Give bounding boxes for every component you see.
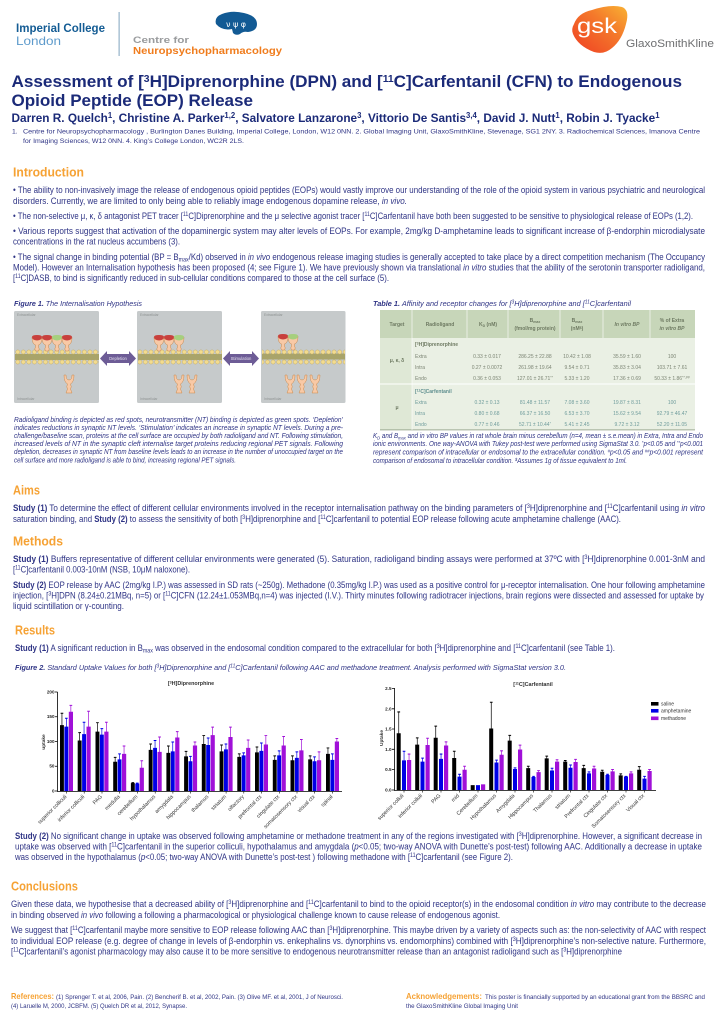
text block: results study 2: Study (2) No significant change in uptake was observed following amphetamine or methadone treatment in any of the regions investigated with [ [15, 831, 578, 841]
bar chart: [3H]Diprenorphine uptake: PAG [92, 794, 104, 806]
text block: aims: C]carfentanil using [613, 503, 681, 513]
text block: methods: C]carfentanil 0.003-10nM (NSB, 10μM naloxone). [21, 564, 190, 574]
table 1 title: Table 1. Affinity and receptor changes for [ [373, 299, 515, 308]
heading: Methods: Methods [13, 534, 63, 548]
table: **,## [682, 376, 690, 380]
text block: introduction: 11 [15, 274, 21, 280]
text block: results study 2: was observed in the hypothalamus (p<0.05; two-way ANOVA with Dunette’s post-test ) following methadone with [ [15, 852, 444, 862]
text block: conclusions: 11 [72, 926, 78, 932]
arrow: stimulation: Stimulation [231, 356, 252, 361]
table: Extra [415, 400, 427, 406]
table: 100 [668, 400, 676, 406]
bar chart: [11C]Carfentanil uptake: 0.5 [385, 767, 392, 772]
table: 5.33 ± 1.20 [564, 376, 590, 382]
table 1 title: C]carfentanil [590, 299, 631, 308]
figure 1 caption [14, 417, 344, 464]
authors: , Robin J. Tyacke [560, 111, 655, 125]
table: [ [415, 389, 417, 395]
table 1 caption: max [398, 436, 407, 440]
table: * [550, 422, 552, 426]
table: 10.42 ± 1.08 [563, 354, 591, 360]
table: 286.25 ± 22.88 [518, 354, 552, 360]
bar chart: [3H]Diprenorphine uptake: hippocampus [166, 794, 193, 821]
references: (4) Laruelle M, 2000, JCBFM. (5) Quelch DR et al, 2012, Synapse. [11, 1004, 187, 1010]
text block: results study 1: was observed in the endosomal condition compared to the extracellular for both [ [153, 643, 437, 653]
logo: Centre for Neuropsychopharmacology: Neuropsychopharmacology [133, 46, 282, 57]
figure 1 caption: challenge/baseline scan, proteins at the cell surface are occupied by both radioligand and NT. Following stimulation, [14, 433, 343, 440]
table: H]Diprenorphine [419, 342, 458, 348]
figure 1 caption: increased levels of NT in the synaptic cleft internalise target proteins reducing regional PET signals. Following [14, 441, 343, 448]
bar chart: [11C]Carfentanil uptake: C]Carfentanil [519, 682, 553, 688]
table: B [530, 318, 533, 324]
table 1 caption: # [608, 448, 610, 454]
table: Radioligand [426, 322, 454, 328]
table 1 caption: and B [380, 433, 399, 440]
affiliations: Centre for Neuropsychopharmacology , Burlington Danes Building, Imperial College, London, W12 0NN. 2. Global Imaging Unit, GlaxoSmithKline, Stevenage, SG1 2NY. 3. Radiochemical Sciences, Imanova Centre [23, 128, 700, 136]
text block: aims: C]carfentanil to potential EOP release following acute amphetamine challenge (AAC). [326, 514, 621, 524]
table: 100 [668, 354, 676, 360]
text block: aims: Study (1) To determine the effect of different cellular environments involved in the receptor internalisation pathway on the binding parameters of [ [13, 503, 578, 513]
table: 52.71 ± 10.44 [519, 422, 550, 428]
text block: results study 1: H]diprenorphine and [ [440, 643, 516, 653]
text block: results study 2 [14, 831, 702, 862]
text block: methods: 11 [15, 566, 21, 572]
table: 19.87 ± 8.31 [613, 400, 641, 406]
text block: introduction: C]DASB, to bind is significantly reduced in sub-cellular conditions compared to those at the cell surface (5). [21, 273, 389, 283]
bar chart: [3H]Diprenorphine uptake: spinal [320, 794, 334, 808]
heading: Aims: Aims [13, 482, 40, 498]
bar chart: [11C]Carfentanil uptake: Thalamus [532, 793, 554, 814]
text block: results study 1: max [143, 648, 153, 654]
text block: conclusions [11, 899, 706, 956]
text block: conclusions: 3 [563, 948, 567, 954]
figure 2 title: H]Diprenorphine and [ [159, 663, 231, 672]
authors: Darren R. Quelch [12, 111, 111, 125]
bar chart: [11C]Carfentanil uptake: Hippocampus [507, 793, 535, 821]
table: 0.80 ± 0.68 [474, 411, 500, 417]
text block: conclusions: 3 [513, 937, 516, 943]
text block: methods: Study (1) Buffers representative of different cellular environments were generated (5). Saturation, radioligand binding assays were performed at 37ºC with [ [13, 554, 620, 564]
table 1 caption: ** [677, 440, 680, 445]
table 1 caption: * [642, 440, 644, 445]
text block: introduction: disorders. Currently, we are limited to only being able to reliably image endogenous dopamine release, in vivo. [13, 196, 407, 206]
figure 2 title: 11 [230, 664, 235, 670]
table: 0.32 ± 0.13 [474, 400, 500, 406]
table: C]Carfentanil [420, 389, 452, 395]
text block: conclusions: 3 [329, 926, 333, 932]
figure 2 title: 3 [157, 664, 159, 670]
table: μ [395, 405, 399, 411]
legend: saline [661, 702, 674, 708]
text block: introduction: • The non-selective μ, κ, δ antagonist PET tracer [ [13, 211, 208, 221]
table 1 caption [373, 433, 704, 465]
table: Intra [415, 411, 425, 417]
legend: amphetamine [661, 709, 692, 715]
text block: conclusions: H]diprenorphine’s non-selective nature. Furthermore, [516, 936, 706, 946]
bar chart: [11C]Carfentanil uptake: 0.0 [385, 788, 392, 792]
logo: GSK GlaxoSmithKline [572, 6, 714, 53]
diagram: membrane panels and receptors: Extracellular [264, 313, 284, 317]
text block: introduction: 11 [183, 212, 189, 218]
figure 1 title: Figure 1. The Internalisation Hypothesis [14, 299, 142, 308]
bar chart: [11C]Carfentanil uptake: inferior colluli [397, 793, 424, 820]
bar chart: [3H]Diprenorphine uptake: 50 [49, 764, 55, 769]
authors: , Salvatore Lanzarone [235, 111, 357, 125]
authors: , Vittorio De Santis [361, 111, 466, 125]
title: 3 [144, 74, 150, 85]
figure 1 caption: Radioligand binding is depicted as red spots, neurotransmitter (NT) binding is depicted as green spots. ‘Depletion’ [14, 417, 343, 424]
bar chart: [3H]Diprenorphine uptake: 150 [47, 714, 55, 719]
table: 6.53 ± 3.70 [564, 411, 590, 417]
text block: methods: 3 [48, 592, 52, 598]
text block: methods: [ [13, 564, 15, 574]
text block: conclusions: in vitro may contribute to the decrease [571, 899, 719, 909]
arrow: depletion: Depletion [109, 356, 128, 361]
table: 9.72 ± 3.12 [614, 422, 640, 428]
table: 9.54 ± 0.71 [564, 365, 590, 371]
text block: results study 1: 3 [437, 644, 440, 650]
text block: introduction: [ [13, 273, 15, 283]
affiliations: for Imaging Sciences, W12 0NN. 4. King’s College London, WC2R 2LS. [23, 138, 244, 145]
text block: results study 1: 11 [515, 644, 522, 650]
references [11, 991, 343, 1010]
text block: methods: injection, [ [13, 590, 53, 600]
logo: Centre for Neuropsychopharmacology: ν ψ φ [226, 20, 246, 29]
text block: conclusions: 3 [228, 900, 232, 906]
text block: results study 2: C]carfentanil in the superior colliculi, hypothalamus and amygdala ( [117, 842, 354, 852]
text block: results study 2: uptake was observed with [ [15, 842, 122, 852]
bar chart: [11C]Carfentanil uptake: [ [513, 682, 515, 688]
references: (1) Sprenger T. et al, 2006, Pain. (2) Bencherif B. et al, 2002, Pain. (3) Olive MF. et al, 2001, J of Neurosci. [56, 995, 343, 1001]
figure 1 caption: depletion, decreases in synaptic NT from baseline levels leads to an increase in the number of unoccupied target on the [14, 449, 343, 456]
bar chart: [11C]Carfentanil uptake: striatum [554, 793, 572, 811]
table 1 caption: ionic environments. One way-ANOVA with Tukey post-test were performed using SigmaStat 3.0. [373, 441, 666, 448]
text block: introduction: max [179, 258, 189, 264]
text block: aims: 3 [242, 515, 246, 521]
title: C]Carfentanil (CFN) to Endogenous [394, 73, 682, 91]
logo: Centre for Neuropsychopharmacology [133, 12, 282, 57]
logo: Imperial College London: London [16, 34, 61, 48]
authors: , Christine A. Parker [112, 111, 225, 125]
authors: 3,4 [466, 111, 477, 120]
authors: 3 [357, 111, 362, 120]
authors: , David J. Nutt [477, 111, 555, 125]
bar chart: [11C]Carfentanil uptake: 2.5 [385, 686, 392, 691]
text block: aims: 11 [607, 504, 613, 510]
bar chart: [11C]Carfentanil uptake: 11 [515, 682, 519, 686]
references: References: [11, 991, 54, 1001]
text block: introduction [13, 185, 705, 283]
table: in vitro BP [659, 326, 685, 332]
table 1 caption: ## [645, 448, 650, 454]
bar chart: [3H]Diprenorphine uptake: H]Diprenorphine [172, 681, 214, 687]
table: 5.41 ± 2.45 [564, 422, 590, 428]
text block: introduction: Model). However an Internalisation hypothesis has been proposed (4; see Figure 1). We have previously shown via translational in vitro studies that the ability of the serotonin transporter radioligand, [13, 262, 705, 272]
table 1 caption: comparison of endosomal to intracellular condition. [373, 458, 528, 465]
bar chart: [11C]Carfentanil uptake: PAG [430, 793, 442, 805]
diagram: membrane panels and receptors: Intracellular [140, 397, 158, 401]
figure 2 title: Figure 2. Standard Uptake Values for both [ [15, 663, 162, 672]
bar chart: [3H]Diprenorphine uptake: thalamus [191, 794, 210, 814]
text block: aims: 3 [527, 504, 530, 510]
table 1 caption: represent comparison of intracellular or endosomal to the extracellular condition. [373, 450, 618, 456]
logo: Imperial College London: Imperial College [16, 21, 105, 35]
acknowledgements: This poster is financially supported by an educational grant from the BBSRC and [485, 995, 705, 1001]
text block: methods [13, 554, 705, 611]
panel: table 1 affinity and receptor changes [373, 299, 704, 465]
bar chart: [11C]Carfentanil uptake [377, 682, 692, 830]
table: 7.08 ± 3.60 [564, 400, 590, 406]
title [12, 73, 682, 110]
table: 0.33 ± 0.017 [473, 354, 501, 360]
heading: Conclusions: Conclusions [11, 878, 78, 894]
text block: introduction: • The signal change in binding potential (BP = B [13, 252, 201, 262]
diagram: membrane panels and receptors: Extracellular [140, 313, 160, 317]
bar chart: [11C]Carfentanil uptake: 1.0 [385, 747, 392, 752]
bar chart: [11C]Carfentanil uptake: Prefrontal ctx [564, 793, 591, 820]
text block: conclusions: Given these data, we hypothesise that a decreased ability of [ [11, 899, 253, 909]
table 1 caption: D [377, 436, 381, 440]
text block: results study 1: Study (1) A significant reduction in B [15, 643, 155, 653]
text block: methods: H]diprenorphine 0.001-3nM and [588, 554, 705, 564]
acknowledgements [406, 991, 705, 1010]
table: 127.01 ± 26.71 [517, 376, 550, 382]
bar chart: [3H]Diprenorphine uptake: 0 [52, 788, 55, 794]
table: μ, κ, δ [390, 358, 404, 364]
legend [651, 702, 692, 722]
bar chart: [3H]Diprenorphine uptake: 3 [170, 680, 172, 684]
logo: Centre for Neuropsychopharmacology: Centre for [133, 35, 189, 46]
title: 11 [383, 74, 394, 85]
table: max [575, 320, 582, 324]
bar chart: [3H]Diprenorphine uptake: somatosensory ctx [263, 794, 299, 830]
table 1 caption: Assumes 1g of tissue equivalent to 1ml. [516, 458, 627, 465]
authors: 1 [108, 111, 113, 120]
legend: methadone [661, 716, 686, 722]
table: Intra [415, 365, 425, 371]
table: 35.83 ± 3.04 [613, 365, 641, 371]
text block: conclusions: to individual EOP release (e.g. degree of change in levels of β-endorphin vs. enkephalins vs. dynorphins vs. endomorphins) combined with [ [11, 936, 560, 946]
text block: results study 1: C]carfentanil (see Table 1). [521, 643, 615, 653]
bar chart: [3H]Diprenorphine uptake: prefrontal ctx [237, 794, 264, 820]
table 1 title: H]diprenorphine and [ [514, 299, 586, 308]
figure 1 caption: cell surface and more radioligand is able to bind, increasing regional PET signals. [14, 458, 236, 464]
bar chart: [11C]Carfentanil uptake: mid [451, 793, 461, 804]
table: (fmol/mg protein) [514, 326, 556, 332]
table: ** [550, 376, 554, 380]
table: 0.77 ± 0.46 [474, 422, 500, 428]
authors: 1,2 [224, 111, 236, 120]
text block: results study 2: C]carfentanil (see Figure 2). [416, 852, 513, 862]
bar chart: [3H]Diprenorphine uptake: hypothalamus [129, 794, 157, 822]
text block: conclusions: H]diprenorphine and [ [231, 899, 309, 909]
bar chart: [11C]Carfentanil uptake: Uptake [379, 730, 385, 746]
table: 52.20 ± 11.05 [657, 422, 687, 428]
table: (nM) [485, 322, 497, 328]
text block: results study 2: H]diprenorphine. However, a significant decrease in [522, 831, 702, 841]
bar chart: [3H]Diprenorphine uptake: medulla [104, 794, 122, 812]
table 1 caption: p<0.001 [679, 441, 703, 448]
bar chart: [3H]Diprenorphine uptake: 100 [47, 739, 55, 744]
text block: results study 2: 11 [410, 853, 416, 859]
bar chart: [11C]Carfentanil uptake: Amygdala [495, 793, 516, 814]
text block: aims: saturation binding, and Study (2) to assess the sensitivity of both [ [13, 514, 258, 524]
text block: conclusions: [ [11, 946, 13, 956]
table: max [533, 320, 540, 324]
bar chart: [11C]Carfentanil uptake: Cingulate ctx [583, 793, 609, 819]
arrow: depletion [100, 351, 136, 366]
text block: introduction: 11 [364, 212, 370, 218]
title: Opioid Peptide (EOP) Release [12, 92, 253, 110]
table: B [572, 318, 575, 324]
bar chart: [3H]Diprenorphine uptake: amygdala [154, 794, 175, 815]
bar chart: [3H]Diprenorphine uptake: uptake [41, 734, 47, 750]
diagram: membrane panels and receptors: Extracellular [17, 313, 37, 317]
bar chart: [11C]Carfentanil uptake: Visual ctx [625, 793, 646, 814]
bar chart: [11C]Carfentanil uptake: Somatosensory ctx [591, 793, 628, 830]
text block: conclusions: 11 [308, 900, 314, 906]
table: D [483, 324, 486, 328]
table 1 caption: K [373, 433, 378, 440]
text block: aims: H]diprenorphine and [ [245, 514, 321, 524]
bar chart: [11C]Carfentanil uptake: Hypothalamus [469, 793, 498, 822]
table: [ [415, 342, 417, 348]
logo: Imperial College London [16, 12, 120, 56]
table 1 caption: p<0.05 and [643, 441, 677, 448]
heading: Results: Results [15, 622, 55, 638]
bar chart: [3H]Diprenorphine uptake: striatum [210, 794, 228, 812]
text block: aims [13, 503, 705, 524]
table: (nM [571, 326, 580, 332]
table: ) [582, 326, 584, 332]
bar chart: [11C]Carfentanil uptake: superior colluli [377, 793, 405, 822]
bar chart: [3H]Diprenorphine uptake: cingulate ctx [256, 794, 281, 820]
table 1 caption: $ [514, 457, 518, 462]
acknowledgements: the GlaxoSmithKline Global Imaging Unit [406, 1004, 518, 1010]
figure 1 caption: indicates reductions in synaptic NT levels. ‘Stimulation’ indicates an increase in synaptic NT levels. During a pre- [14, 425, 344, 432]
bar chart: [3H]Diprenorphine uptake: superior colliculi [37, 794, 68, 826]
text block: aims: in vitro [681, 503, 705, 513]
text block: conclusions: We suggest that [ [11, 925, 80, 935]
text block: aims: 11 [320, 515, 326, 521]
authors: 1 [555, 111, 560, 120]
affiliations: 1. [12, 128, 18, 136]
bar chart: [3H]Diprenorphine uptake: olfactory [227, 794, 246, 813]
bar chart: [3H]Diprenorphine uptake: [ [168, 681, 170, 687]
table: K [479, 322, 483, 328]
text block: conclusions: in binding observed in vivo following a following a pharmacological or physiological challenge known to cause release of endogenous agonist. [11, 910, 500, 920]
table: Extra [415, 354, 427, 360]
table: Target [390, 322, 405, 328]
text block: conclusions: 11 [13, 948, 19, 954]
text block: conclusions: C]carfentanil maybe more sensitive to EOP release following AAC than [ [78, 925, 330, 935]
diagram: membrane panels and receptors: Intracellular [17, 397, 35, 401]
logo: GSK GlaxoSmithKline: GlaxoSmithKline [626, 38, 714, 50]
text block: methods: 11 [165, 592, 171, 598]
text block: methods: 3 [584, 555, 588, 561]
table: 66.37 ± 16.50 [520, 411, 550, 417]
title: H]Diprenorphine (DPN) and [ [150, 73, 383, 91]
text block: conclusions: C]carfentanil’s agonist pharmacology may also cause it to be more sensitive to endogenous neurotransmitter release than an antagonist radioligand such as [ [19, 946, 564, 956]
bar chart: [3H]Diprenorphine uptake: 200 [47, 690, 55, 694]
table: 261.98 ± 19.64 [518, 365, 552, 371]
heading: Introduction: Introduction [13, 164, 84, 180]
text block: introduction: /Kd) observed in [189, 252, 248, 262]
table 1 title: 11 [585, 300, 590, 306]
table: % of Extra [660, 318, 684, 324]
authors: 1 [655, 111, 660, 120]
diagram: membrane panels and receptors: Intracellular [264, 397, 282, 401]
arrow: stimulation [223, 351, 259, 366]
bar chart: [3H]Diprenorphine uptake: visual ctx [297, 794, 317, 814]
acknowledgements: Acknowledgements: [406, 991, 482, 1001]
table: 35.59 ± 1.60 [613, 354, 641, 360]
table: 3 [417, 342, 419, 346]
table 1 title: 3 [512, 300, 514, 306]
table: 11 [417, 388, 420, 392]
bar chart: [11C]Carfentanil uptake: 1.5 [385, 726, 392, 732]
text block: introduction: C]Diprenorphine and the μ selective agonist tracer [ [188, 211, 365, 221]
text block: methods: liquid scintillation or γ-counting. [13, 601, 124, 611]
table: Endo [415, 422, 427, 428]
bar chart: [3H]Diprenorphine uptake: cerebellum [116, 794, 140, 817]
text block: aims: H]diprenorphine and [ [530, 503, 608, 513]
table: 50.33 ± 1.86 [654, 376, 682, 382]
title: Assessment of [ [12, 73, 139, 91]
diagram: membrane panels and receptors [14, 311, 346, 403]
panel: figure 1 internalisation hypothesis [14, 299, 346, 464]
text block: introduction: concentrations in the rat nucleus accumbens (3). [13, 236, 180, 246]
table: 81.48 ± 11.57 [520, 400, 550, 406]
affiliations [12, 128, 700, 145]
text block: conclusions: H]diprenorphine [566, 946, 622, 956]
table: 0.27 ± 0.0072 [472, 365, 502, 371]
bar chart: [3H]Diprenorphine uptake [37, 680, 342, 830]
table 1 caption: p<0.001 represent [649, 450, 704, 456]
figure 2 title: C]Carfentanil following AAC and methadone treatment. Analysis performed with SigmaStat version 3.0. [235, 663, 566, 672]
table: In vitro BP [614, 322, 640, 328]
text block: methods: H]DPN (8.24±0.21MBq, n=5) or [ [51, 590, 166, 600]
table: 17.36 ± 0.69 [613, 376, 641, 382]
table: 15.62 ± 9.54 [613, 411, 641, 417]
logo: GSK GlaxoSmithKline: gsk [577, 15, 618, 38]
bar chart: [11C]Carfentanil uptake: Cerebellum [456, 793, 480, 817]
bar chart: [11C]Carfentanil uptake: 2.0 [385, 706, 392, 711]
table: 92.79 ± 46.47 [657, 411, 687, 417]
table: 0.36 ± 0.053 [473, 376, 501, 382]
text block: results study 2: 3 [519, 832, 522, 838]
text block: conclusions: C]carfentanil to bind to the opioid receptor(s) in the endosomal condition [314, 899, 571, 909]
table 1 caption: p<0.05 and [609, 450, 645, 456]
text block: results study 2: 11 [111, 842, 118, 848]
table: $ [580, 326, 582, 330]
table: 103.71 ± 7.61 [657, 365, 687, 371]
table [380, 310, 695, 430]
table: Endo [415, 376, 427, 382]
bar chart: [3H]Diprenorphine uptake: inferior colliculi [57, 794, 86, 823]
